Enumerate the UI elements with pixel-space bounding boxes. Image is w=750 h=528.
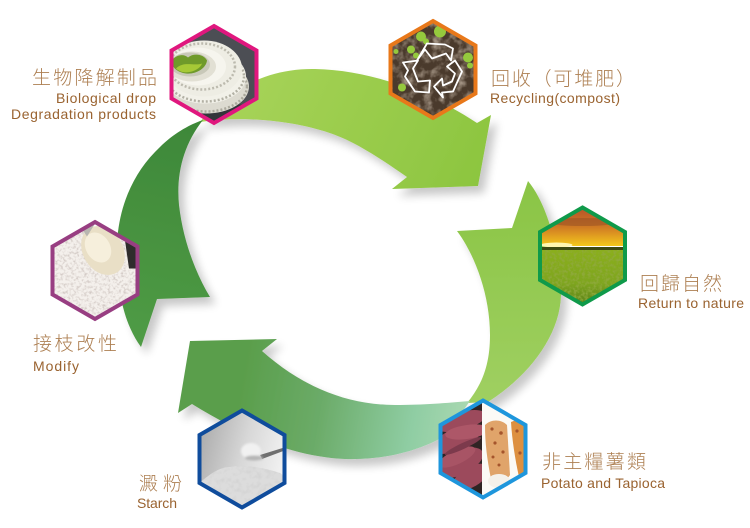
label: return to nature (638, 273, 744, 311)
label: recycling: Recycling(compost) (490, 90, 620, 106)
label: potato and tapioca: Potato and Tapioca (541, 475, 665, 491)
label: potato and tapioca: 非主糧薯類 (542, 451, 646, 473)
label: starch: Starch (137, 495, 177, 511)
label: biodegradable products: Degradation products (11, 106, 156, 122)
label: potato and tapioca (541, 451, 665, 491)
icon: sunset field hexagon (536, 204, 628, 308)
label: return to nature: Return to nature (638, 295, 744, 311)
arrow: top light green (200, 69, 491, 189)
label: biodegradable products: Biological drop (56, 90, 156, 106)
label: biodegradable products (11, 67, 157, 122)
label: biodegradable products: 生物降解制品 (32, 67, 157, 89)
icon: starch powder hexagon (196, 407, 288, 511)
label: recycling: 回收（可堆肥） (491, 68, 635, 90)
arrow: bottom green fade (178, 339, 470, 459)
label: modify (33, 333, 117, 374)
label: modify: Modify (33, 358, 79, 374)
icon: sweet potato and tapioca hexagon (438, 398, 528, 500)
label: recycling (490, 68, 635, 106)
label: starch (137, 473, 182, 511)
label: return to nature: 回歸自然 (640, 273, 722, 295)
icon: biodegradable plates hexagon (170, 24, 258, 126)
icon: modified starch beads hexagon (49, 218, 141, 322)
arrow: left dark green (117, 120, 210, 347)
icon: compost recycling hexagon (387, 18, 479, 122)
arrow: right green (457, 181, 561, 403)
label: modify: 接枝改性 (33, 333, 117, 355)
label: starch: 澱粉 (139, 473, 182, 495)
